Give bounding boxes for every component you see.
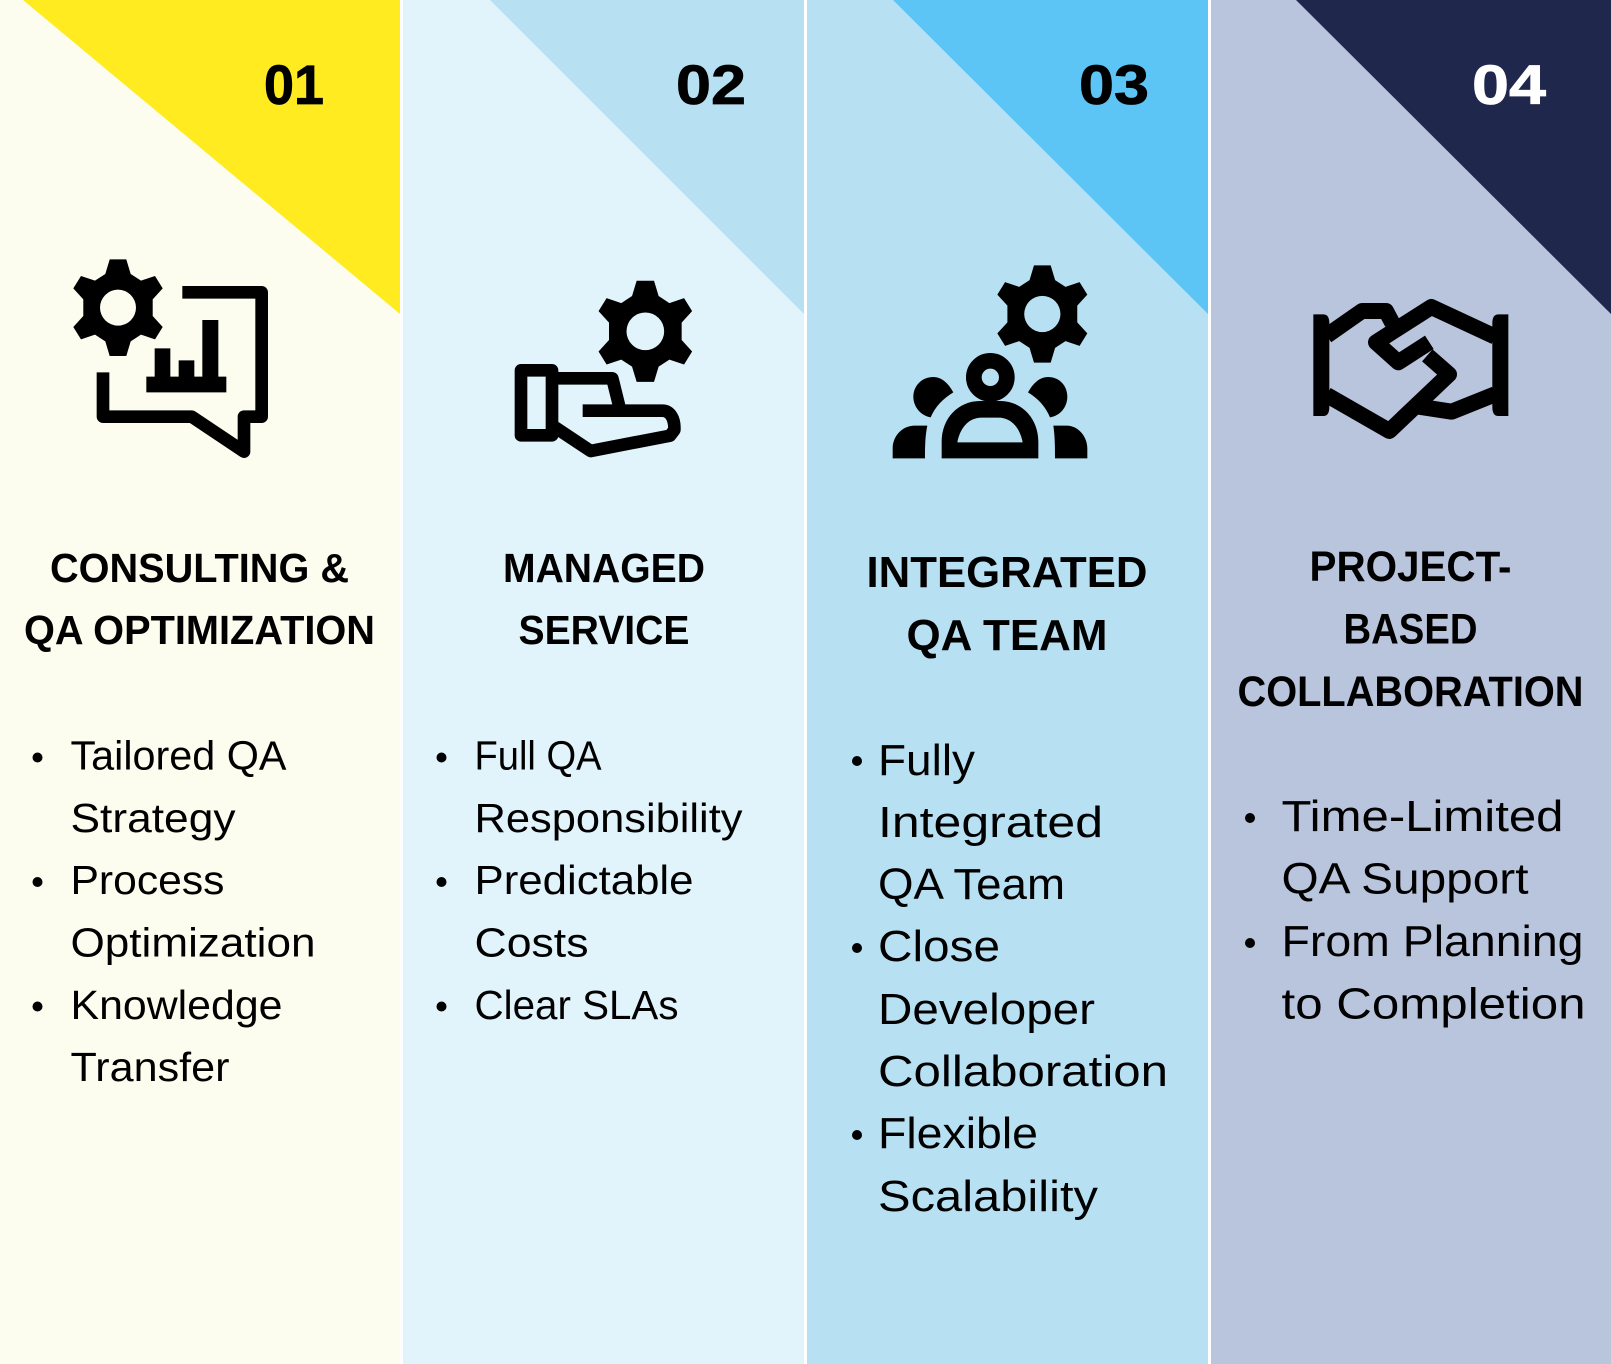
bullet list 04: QA Support <box>1282 854 1528 904</box>
bullet list 03: Integrated <box>878 798 1103 847</box>
bullet list 01: Tailored QA <box>70 732 287 778</box>
panel background 01 <box>0 0 400 1364</box>
bullet list 04: Time-Limited <box>1282 792 1564 841</box>
bullet list 02 <box>436 732 743 1028</box>
icon: team with gear <box>893 265 1087 458</box>
bullet list 02: Clear SLAs <box>474 982 678 1028</box>
bullet list 02: Predictable <box>474 857 694 903</box>
bullet list 02: Responsibility <box>474 795 743 841</box>
bullet list 03: Developer <box>878 985 1095 1034</box>
panel background 03 <box>807 0 1208 1364</box>
heading 03 <box>866 548 1148 660</box>
bullet list 03: Scalability <box>878 1172 1098 1221</box>
heading 02: MANAGED <box>503 545 705 591</box>
number 04: 04 <box>1472 53 1546 116</box>
bullet list 01 <box>32 732 316 1090</box>
heading 03: INTEGRATED <box>866 548 1148 597</box>
bullet list 03: Collaboration <box>878 1047 1168 1096</box>
number 01: 01 <box>264 53 324 116</box>
heading 01 <box>24 545 375 653</box>
number 02: 02 <box>676 53 746 116</box>
bullet list 01: Process <box>70 857 224 903</box>
heading 04: BASED <box>1344 606 1478 654</box>
panel background 02 <box>403 0 804 1364</box>
heading 01: QA OPTIMIZATION <box>24 607 375 653</box>
panel: 04 project-based collaboration <box>1211 0 1611 1364</box>
bullet list 03 <box>852 736 1168 1221</box>
bullet list 03: QA Team <box>878 860 1065 909</box>
number 03: 03 <box>1079 53 1149 116</box>
bullet list 01: Optimization <box>70 920 316 966</box>
panel: 03 integrated QA team <box>807 0 1208 1364</box>
bullet list 04: to Completion <box>1282 980 1586 1028</box>
heading 01: CONSULTING & <box>50 545 349 591</box>
corner triangle 02 <box>490 0 804 314</box>
bullet list 02: Costs <box>474 920 588 966</box>
bullet list 01: Transfer <box>70 1044 230 1090</box>
bullet list 03: Fully <box>878 736 975 785</box>
panel background 04 <box>1211 0 1611 1364</box>
heading 04: PROJECT- <box>1310 543 1512 591</box>
bullet list 03: Close <box>878 922 1000 971</box>
bullet list 01: Knowledge <box>70 982 282 1028</box>
corner triangle 01 <box>23 0 400 314</box>
heading 03: QA TEAM <box>906 611 1108 660</box>
heading 02 <box>503 545 705 653</box>
heading 04 <box>1238 543 1584 716</box>
bullet list 04: From Planning <box>1282 917 1584 966</box>
bullet list 04 <box>1245 792 1586 1028</box>
bullet list 02: Full QA <box>474 732 602 778</box>
icon: handshake <box>1313 307 1508 431</box>
corner triangle 04 <box>1296 0 1611 314</box>
bullet list 03: Flexible <box>878 1109 1038 1158</box>
icon: hand holding gear <box>521 281 692 451</box>
heading 02: SERVICE <box>518 607 690 653</box>
panel: 01 consulting and QA optimization <box>0 0 400 1364</box>
bullet list 01: Strategy <box>70 795 236 841</box>
corner triangle 03 <box>893 0 1208 314</box>
panel: 02 managed service <box>403 0 804 1364</box>
icon: gear and chart speech bubble <box>73 259 262 452</box>
heading 04: COLLABORATION <box>1238 668 1584 716</box>
